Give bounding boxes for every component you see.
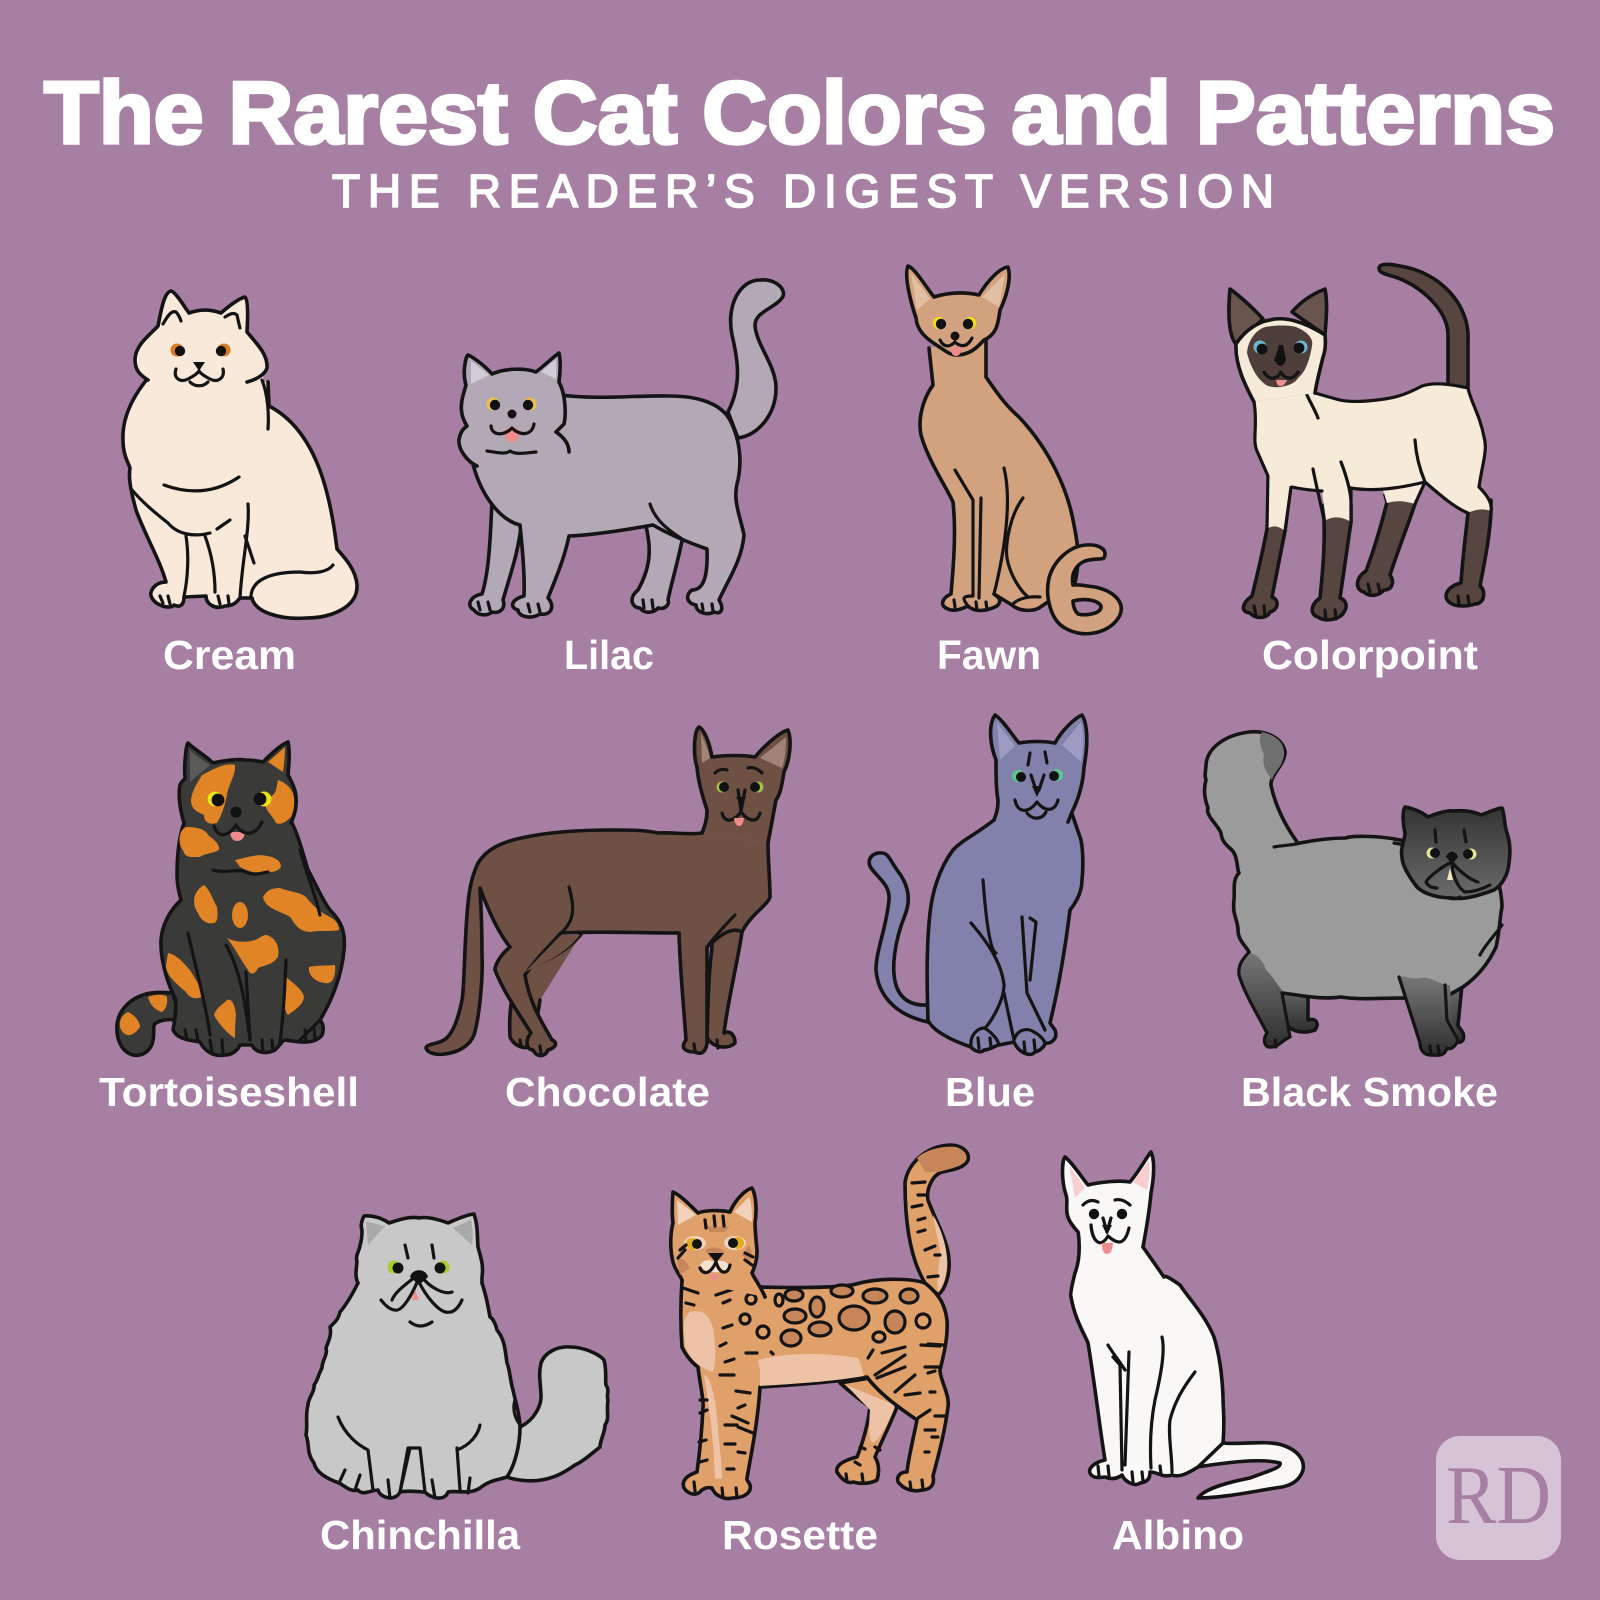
colorpoint ears [1229,289,1327,344]
tortoiseshell lines [185,850,320,1054]
colorpoint head and mask [1236,319,1325,402]
rosette tail [905,1145,968,1295]
albino tail [1190,1443,1303,1498]
lilac far legs [632,515,684,612]
cat: colorpoint [1229,264,1491,620]
black smoke lines [1274,843,1502,955]
chinchilla body lines [338,1400,520,1498]
lilac tail [728,280,783,438]
tortoiseshell ears [190,750,210,782]
chocolate leg fill [525,935,580,972]
cat: lilac [459,280,783,617]
cat: rosette [671,1145,968,1499]
chocolate inner lines [520,887,735,1054]
albino lines [1098,1337,1195,1482]
label: black smoke: Black Smoke [1241,1069,1498,1115]
cream neck fill [150,370,267,400]
colorpoint tail [1379,264,1468,392]
rosette body [681,1279,948,1499]
chinchilla body [306,1283,520,1498]
albino head [1062,1152,1154,1247]
rosette rosettes [740,1285,930,1346]
cream inner lines [132,477,333,604]
tortoiseshell tail [117,992,180,1055]
albino body [1071,1230,1224,1484]
cat: blue [869,715,1087,1054]
colorpoint far rear leg [1357,495,1418,595]
black smoke far legs [1275,975,1317,1032]
colorpoint front leg [1312,505,1351,620]
lilac ears and face [471,359,556,384]
chocolate ears and face [701,733,786,768]
label: chinchilla: Chinchilla [320,1512,521,1558]
lilac haunch and toes [478,504,713,612]
subtitle: THE READER’S DIGEST VERSION [332,165,1274,217]
RD logo: RD [1446,1449,1551,1542]
chocolate far front leg [707,920,744,1047]
chinchilla tail [507,1347,608,1481]
black smoke face [1426,848,1438,858]
label: tortoiseshell: Tortoiseshell [99,1069,359,1115]
chinchilla head [356,1214,483,1283]
label: lilac: Lilac [564,632,654,678]
black smoke body and tail [1205,732,1502,1000]
cat: chinchilla [306,1214,608,1498]
label: colorpoint: Colorpoint [1262,632,1478,678]
cream head [135,291,267,382]
cat: cream [123,291,357,618]
fawn tail [1048,545,1121,634]
cat: fawn [907,266,1121,634]
tortoiseshell body [161,823,344,1055]
RD logo [1436,1436,1561,1560]
black smoke head [1402,807,1510,898]
colorpoint body lines [1254,393,1469,620]
fawn body lines [954,468,1040,610]
cat: chocolate [426,727,790,1056]
colorpoint far front leg [1243,515,1287,617]
cat: tortoiseshell [117,742,344,1055]
cream body [123,378,357,618]
label: chocolate: Chocolate [505,1069,710,1115]
fawn ears and face [911,273,1005,310]
label: fawn: Fawn [937,632,1041,678]
chocolate body [426,830,770,1056]
title: The Rarest Cat Colors and Patterns [44,63,1555,162]
rosette pale fur [684,1311,864,1479]
black smoke tail tip and leg shading [1260,732,1284,780]
label: blue: Blue [945,1069,1035,1115]
cat: albino [1062,1152,1303,1498]
chocolate far rear leg [510,933,582,1048]
tortoiseshell face [208,792,222,806]
blue tail [869,853,928,1022]
label: rosette: Rosette [722,1512,878,1558]
tortoiseshell patches [120,764,339,1038]
cream face [163,312,268,429]
albino ears and face [1069,1160,1150,1198]
cat: black smoke [1205,732,1510,1055]
chocolate head [695,727,790,843]
colorpoint rear leg [1446,500,1491,606]
label: cream: Cream [163,632,296,678]
rosette face [677,1225,752,1275]
colorpoint face [1254,340,1266,354]
blue ears and face [997,722,1083,762]
label: albino: Albino [1112,1512,1244,1558]
rosette far rear leg [837,1378,897,1483]
blue head [991,715,1087,822]
lilac body [472,395,744,617]
blue inner lines [971,880,1045,1052]
rosette ears [677,1197,752,1225]
fawn head [907,266,1009,355]
chinchilla ears and face [366,1220,473,1245]
rosette head [671,1188,765,1297]
lilac head [459,353,569,466]
tortoiseshell head [179,742,296,823]
fawn body [920,339,1078,610]
blue body [927,805,1083,1054]
colorpoint body [1254,384,1491,522]
rosette stripes [683,1182,945,1497]
